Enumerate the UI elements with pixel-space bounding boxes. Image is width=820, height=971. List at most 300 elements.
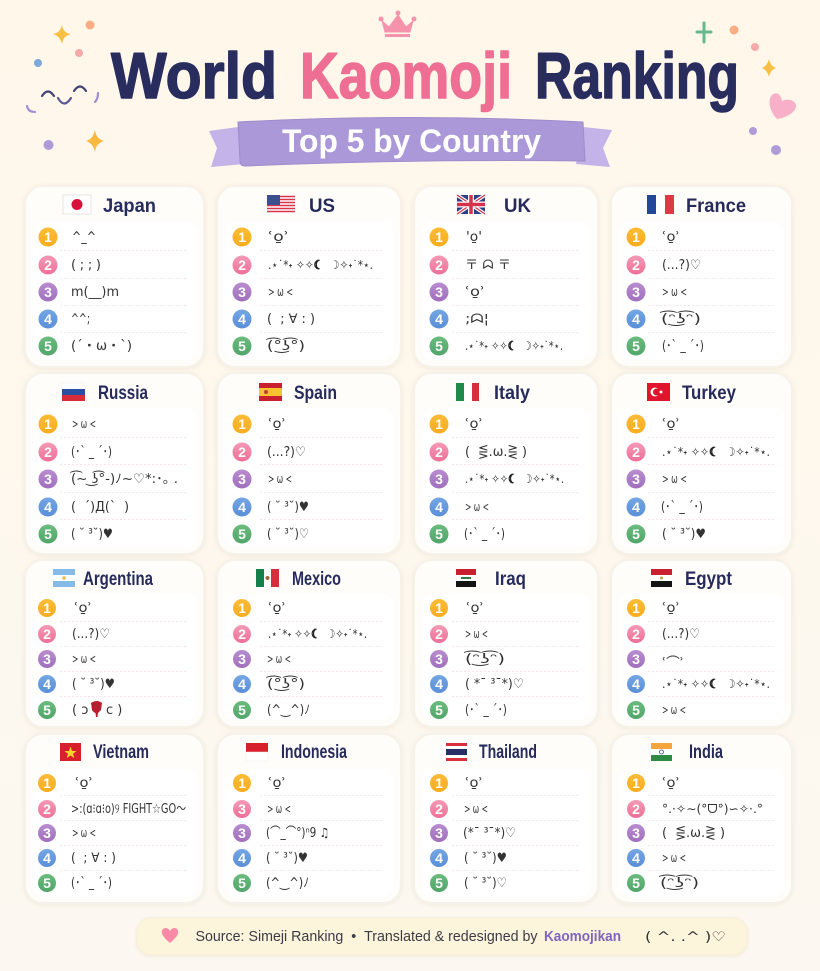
rank 1: UK: 'o̱' (466, 230, 482, 245)
rank 1: Thailand: ʿo̱ʾ (465, 776, 483, 791)
rank 4: Iraq: 4 (435, 676, 443, 692)
rank 3: India: ( ⋚.ω.⋛ ) (662, 825, 725, 841)
heading: Egypt: Egypt (685, 569, 733, 590)
rank 1: Vietnam: 1 (43, 775, 51, 791)
rank 2: Egypt (627, 625, 700, 643)
panel: Spain (217, 373, 401, 554)
rank 4: UK (430, 310, 489, 328)
rank 5: Vietnam: (･` _ ´･) (71, 876, 112, 891)
rank 5: Iraq: (･` _ ´･) (465, 703, 507, 718)
rank 2: Indonesia: > ω < (267, 802, 291, 816)
panel: US (217, 186, 401, 367)
rank 2: Egypt: 2 (632, 626, 640, 642)
rank 1: US: ʿo̱ʾ (268, 230, 289, 245)
rank 2: Japan: ( ; ; ) (71, 258, 101, 273)
rank 1: Japan: 1 (44, 229, 52, 245)
flag: Turkey (647, 383, 670, 401)
rank 2: Thailand: 2 (435, 801, 443, 817)
flag: Russia (62, 383, 85, 401)
panel: Russia (25, 373, 204, 554)
rank 4: Indonesia: 4 (238, 850, 246, 866)
rank 3: France (626, 282, 687, 302)
rank 3: Russia: 3 (44, 471, 52, 487)
rank 4: Egypt: .⋆˙*˖ ✧✧☾ ☽✧˖˙*⋆. (662, 677, 770, 691)
heading: Argentina: Argentina (83, 569, 153, 590)
panel: France (611, 186, 792, 367)
panel: Argentina (25, 560, 204, 727)
rank 3: US: > ω < (268, 285, 293, 299)
rank 4: Egypt (627, 675, 770, 693)
rank 4: Italy: > ω < (465, 500, 489, 514)
panel: Japan (25, 186, 204, 367)
rank 3: Thailand: 3 (435, 825, 443, 841)
rank 2: France (626, 256, 701, 274)
rank 2: Vietnam (38, 800, 186, 818)
rank 3: Italy (430, 470, 564, 488)
rank 2: Thailand: > ω < (464, 802, 488, 816)
rank 2: UK: 〒 ᗣ 〒 (465, 258, 511, 273)
panel: Mexico (217, 560, 401, 727)
rank 5: India (627, 874, 699, 892)
rank 5: Turkey (626, 524, 706, 544)
rank 3: Iraq: (͡ᵔ͜ʖ͡ᵔ) (464, 651, 505, 667)
rank 3: Turkey: 3 (632, 471, 640, 487)
rank 4: Egypt: 4 (632, 676, 640, 692)
rank 1: Russia: 1 (44, 416, 52, 432)
footer kaomoji: ( ^. .^ )♡ (645, 930, 726, 945)
panel: Indonesia (217, 734, 401, 903)
rank 4: Argentina: 4 (43, 676, 51, 692)
rank 2: Russia (38, 442, 112, 462)
panel: Vietnam (25, 734, 204, 903)
rank 1: Indonesia: 1 (238, 775, 246, 791)
rank 4: Turkey: 4 (632, 499, 640, 515)
rank 3: Egypt: 3 (632, 651, 640, 667)
heading: Vietnam: Vietnam (93, 742, 149, 763)
rank 2: Spain (232, 442, 306, 462)
rank 5: US: 5 (238, 338, 246, 354)
flag: US (267, 195, 295, 214)
rank 5: Russia: 5 (44, 526, 52, 542)
rank 5: US (232, 336, 305, 356)
rank 2: Indonesia: 3 (238, 801, 246, 817)
rank 1: India: ʿo̱ʾ (662, 776, 680, 791)
flag: Mexico (256, 569, 279, 587)
rank 1: Thailand: 1 (435, 775, 443, 791)
rank 2: Thailand (430, 800, 488, 818)
rank 1: Mexico: 1 (238, 600, 246, 616)
rank 1: Spain: 1 (238, 416, 246, 432)
rank 2: Iraq: > ω < (465, 627, 488, 641)
rank 3: Thailand: (*¯ ³¯*)♡ (463, 826, 516, 841)
heading: Italy: Italy (494, 383, 530, 404)
rank 2: US: 2 (238, 257, 246, 273)
rank 4: Mexico: (͡°͜ʖ͡°) (266, 676, 305, 692)
rank 1: Egypt: ʿo̱ʾ (662, 601, 680, 616)
rank 1: US: 1 (238, 229, 246, 245)
rank 2: Italy: ( ⋚.ω.⋛ ) (465, 444, 527, 460)
rank 3: India (627, 824, 725, 842)
rank 3: Russia (38, 470, 178, 488)
rank 2: Mexico: 2 (238, 626, 246, 642)
rank 3: Iraq: 3 (435, 651, 443, 667)
rank 5: India: (͡ᵔ͜ʖ͡ᵔ) (659, 875, 699, 891)
rank 3: Indonesia: 3 (238, 825, 246, 841)
rank 5: Italy: (･` _ ´･) (464, 527, 505, 542)
rank 3: Indonesia (233, 824, 329, 842)
flag: Iraq (456, 569, 476, 587)
rank 4: US: 4 (238, 311, 246, 327)
rank 4: Spain: 4 (238, 499, 246, 515)
rank 4: Japan: 4 (44, 311, 52, 327)
rank 3: Mexico: > ω < (267, 652, 291, 666)
rank 3: Argentina: > ω < (72, 652, 96, 666)
rank 5: UK: 5 (435, 338, 443, 354)
rank 3: Mexico (233, 650, 291, 668)
rank 3: India: 3 (632, 825, 640, 841)
rank 4: Japan (38, 310, 90, 328)
heading: Turkey: Turkey (682, 383, 736, 404)
rank 4: Russia (38, 498, 129, 516)
heading: Spain: Spain (294, 383, 337, 404)
rank 3: Japan: 3 (44, 284, 52, 300)
rank 4: US: ( ; ∀ : ) (267, 312, 315, 327)
rank 5: Russia (38, 524, 113, 544)
panel: Turkey (611, 373, 792, 554)
flag: France (647, 195, 674, 214)
rank 2: Italy (430, 442, 527, 462)
rank 4: US (232, 310, 315, 328)
rank 5: Iraq (430, 701, 507, 719)
rank 2: Vietnam: >:(ɑ⁝ɑ⁝o)୨ FIGHT☆GO〜 (71, 802, 186, 817)
heading: US: US (309, 196, 335, 217)
flag: Italy (456, 383, 479, 401)
flag: India (651, 743, 672, 761)
rank 4: Vietnam (38, 849, 116, 867)
rank 1: Vietnam: ʿo̱ʾ (75, 776, 93, 791)
rank 1: UK (430, 228, 482, 246)
rank 3: US (232, 282, 293, 302)
panel: Italy (414, 373, 598, 554)
rank 1: Iraq: ʿo̱ʾ (466, 601, 484, 616)
flag: Vietnam (60, 743, 81, 761)
rank 1: Argentina: 1 (43, 600, 51, 616)
rank 3: Indonesia: (⌒_⌒°)ⁿ9 ♫ (266, 826, 329, 841)
rank 3: Egypt (627, 650, 684, 671)
rank 5: Spain: 5 (238, 526, 246, 542)
rank 1: Egypt (627, 599, 680, 617)
rank 2: Russia: 2 (44, 444, 52, 460)
heading: France: France (686, 196, 746, 217)
rank 4: Vietnam: 4 (43, 850, 51, 866)
rank 3: France: 3 (632, 284, 640, 300)
rank 1: Japan (38, 228, 96, 246)
panel: Egypt (611, 560, 792, 727)
rank 1: Egypt: 1 (632, 600, 640, 616)
heading: Russia: Russia (98, 383, 148, 404)
rank 4: France: 4 (632, 311, 640, 327)
rank 1: France: 1 (632, 229, 640, 245)
footer bar (137, 918, 747, 955)
rank 2: Mexico: .⋆˙*˖ ✧✧☾ ☽✧˖˙*⋆. (268, 627, 367, 641)
rank 2: Turkey (626, 442, 770, 462)
rank 3: Turkey: > ω < (662, 472, 687, 486)
rank 5: Egypt: > ω < (662, 703, 686, 717)
rank 1: Russia (38, 414, 96, 434)
rank 2: US: .⋆˙*˖ ✧✧☾ ☽✧˖˙*⋆. (268, 258, 373, 272)
rank 5: Spain: ( ˘ ³˘)♡ (267, 527, 309, 542)
rank 4: Argentina: ( ˘ ³˘)♥ (72, 677, 115, 692)
rank 4: Thailand: ( ˘ ³˘)♥ (464, 851, 507, 866)
rank 1: France (626, 228, 680, 246)
rank 2: US (232, 256, 373, 274)
flag: UK (457, 195, 485, 214)
rank 4: India: 4 (632, 850, 640, 866)
rank 4: France: (͡ᵔ͜ʖ͡ᵔ) (660, 311, 701, 327)
rank 4: Japan: ^^; (71, 312, 90, 327)
rank 2: Japan: 2 (44, 257, 52, 273)
rank 5: Turkey: ( ˘ ³˘)♥ (662, 527, 706, 542)
rank 3: Argentina: 3 (43, 651, 51, 667)
rank 3: Italy: 3 (435, 471, 443, 487)
rank 5: France (626, 336, 704, 356)
rank 3: France: > ω < (662, 285, 687, 299)
rank 4: France (626, 310, 701, 328)
rank 5: India: 5 (632, 875, 640, 891)
flag: Spain (259, 383, 282, 401)
title: World (111, 39, 277, 112)
rank 1: Argentina (38, 599, 92, 617)
rank 1: US (232, 228, 289, 246)
rank 1: Russia: > ω < (72, 417, 96, 431)
rank 1: Argentina: ʿo̱ʾ (74, 601, 92, 616)
heading: Indonesia: Indonesia (281, 742, 347, 763)
rank 5: UK (430, 336, 563, 356)
rank 5: Mexico: 5 (238, 702, 246, 718)
rank 1: India (627, 774, 680, 792)
rank 4: Spain: ( ˘ ³˘)♥ (267, 500, 309, 515)
rank 4: Mexico: 4 (238, 676, 246, 692)
source credit: Source: Simeji Ranking • Translated & redesigned by (196, 928, 538, 945)
rank 4: Thailand (430, 849, 507, 867)
rank 1: Italy: ʿo̱ʾ (465, 417, 483, 432)
heading: Iraq: Iraq (495, 569, 526, 590)
flag: Thailand (446, 743, 467, 761)
rank 4: Russia: ( ´)Д(` ) (71, 500, 129, 515)
rank 4: UK: 4 (435, 311, 443, 327)
ribbon banner (209, 118, 612, 167)
rank 4: Turkey: (･` _ ´･) (661, 500, 703, 515)
rank 1: Vietnam (38, 774, 93, 792)
rank 1: Turkey (626, 414, 680, 434)
rank 2: Mexico (233, 625, 367, 643)
rank 2: India: °.·✧∼(°ᗜ°)∽✧·.° (662, 802, 763, 816)
rank 5: Iraq: 5 (435, 702, 443, 718)
flag: Egypt (651, 569, 672, 587)
decorations: left sparkles and face (27, 20, 104, 152)
rank 3: Italy: .⋆˙*˖ ✧✧☾ ☽✧˖˙*⋆. (465, 472, 564, 486)
rank 5: Italy: 5 (435, 526, 443, 542)
rank 1: Spain: ʿo̱ʾ (268, 417, 286, 432)
rank 4: Italy: 4 (435, 499, 443, 515)
rank 2: Turkey: .⋆˙*˖ ✧✧☾ ☽✧˖˙*⋆. (662, 445, 770, 459)
rank 2: Iraq (430, 625, 488, 643)
rank 1: Mexico (233, 599, 286, 617)
rank 4: Italy (430, 498, 489, 516)
rank 1: Turkey: 1 (632, 416, 640, 432)
rank 2: UK: 2 (435, 257, 443, 273)
rank 3: Thailand (430, 824, 516, 842)
rank 5: Argentina: c ) (106, 703, 122, 718)
rank 2: Spain: (...?)♡ (267, 445, 306, 460)
rank 4: Indonesia (233, 849, 308, 867)
rank 1: Iraq (430, 599, 484, 617)
rank 3: Vietnam (38, 824, 96, 842)
rank 4: Iraq (430, 675, 524, 693)
rank 2: Russia: (･` _ ´･) (71, 445, 112, 460)
rank 1: Indonesia (233, 774, 286, 792)
rank 2: France: (...?)♡ (662, 258, 701, 273)
rank 3: Japan (38, 282, 119, 302)
rank 4: Mexico (233, 675, 305, 693)
panel: Iraq (414, 560, 598, 727)
rank 3: UK: ʿo̱ʾ (465, 285, 485, 300)
rank 1: Indonesia: ʿo̱ʾ (268, 776, 286, 791)
rank 5: UK: .⋆˙*˖ ✧✧☾ ☽✧˖˙*⋆. (465, 339, 563, 353)
rank 3: Vietnam: 3 (43, 825, 51, 841)
rank 4: Argentina (38, 675, 115, 693)
decorations: right sparkles and heart (697, 23, 796, 155)
flag: Argentina (53, 569, 75, 587)
rank 5: Vietnam: 5 (43, 875, 51, 891)
rank 4: India: > ω < (662, 851, 686, 865)
rank 4: Vietnam: ( ; ∀ : ) (71, 851, 116, 866)
rank 5: Argentina: 5 (43, 702, 51, 718)
rank 3: Iraq (430, 650, 505, 668)
rank 3: Mexico: 3 (238, 651, 246, 667)
rank 2: Italy: 2 (435, 444, 443, 460)
rank 5: Argentina (38, 701, 122, 719)
rank 4: Turkey (626, 498, 703, 516)
rank 5: Spain (232, 524, 309, 544)
rank 2: Argentina: (...?)♡ (72, 627, 110, 642)
heading: Mexico: Mexico (292, 569, 341, 590)
rank 5: Thailand: ( ˘ ³˘)♡ (464, 876, 507, 891)
rank 5: Egypt: 5 (632, 702, 640, 718)
flag: Indonesia (246, 743, 268, 761)
rank 2: Iraq: 2 (435, 626, 443, 642)
rank 1: UK: 1 (435, 229, 443, 245)
rank 4: Iraq: ( *¯ ³¯*)♡ (465, 677, 524, 692)
rank 5: Thailand (430, 874, 507, 892)
rank 2: Japan (38, 256, 101, 274)
rank 2: Argentina (38, 625, 110, 643)
rank 5: Vietnam (38, 874, 112, 892)
title (111, 39, 739, 112)
rank 5: Mexico (233, 701, 310, 719)
rank 5: Japan (38, 336, 132, 356)
rank 5: Argentina: ( ɔ (72, 703, 88, 718)
heading: India: India (689, 742, 723, 763)
rank 2: Argentina: 2 (43, 626, 51, 642)
rank 2: Indonesia (233, 800, 291, 818)
title: Kaomoji (300, 39, 512, 112)
rank 1: Thailand (430, 774, 483, 792)
rank 3: Russia: (͡~ ͜ʖ͡°-)ﾉ~♡*:･｡ . (70, 471, 178, 487)
rank 3: US: 3 (238, 284, 246, 300)
rank 5: Indonesia (233, 874, 309, 892)
title: Ranking (535, 39, 739, 112)
rank 3: Egypt: ʿ⌒ʾ (662, 656, 684, 671)
rank 5: Indonesia: (^‿^)ﾉ (266, 876, 309, 891)
rank 4: UK: ;ᗣ¦ (465, 312, 489, 327)
heading: Thailand: Thailand (479, 742, 537, 763)
rank 1: Spain (232, 414, 286, 434)
panel: India (611, 734, 792, 903)
rank 3: Turkey (626, 470, 687, 488)
rank 2: UK (430, 256, 511, 274)
rank 5: Japan: (´・ω・`) (71, 339, 132, 354)
rank 3: Vietnam: > ω < (72, 826, 96, 840)
rank 5: Russia: ( ˘ ³˘)♥ (71, 527, 113, 542)
rank 3: UK (430, 282, 485, 302)
rank 5: Egypt (627, 701, 686, 719)
rank 5: France: 5 (632, 338, 640, 354)
rank 1: Italy: 1 (435, 416, 443, 432)
rank 4: Russia: 4 (44, 499, 52, 515)
rank 2: Vietnam: 2 (43, 801, 51, 817)
rank 3: Spain: 3 (238, 471, 246, 487)
rank 5: Indonesia: 5 (238, 875, 246, 891)
rank 5: Thailand: 5 (435, 875, 443, 891)
icon: crown (378, 10, 416, 37)
rank 1: Italy (430, 414, 483, 434)
rank 3: UK: 3 (435, 284, 443, 300)
rank 3: Spain (232, 470, 292, 488)
rank 5: US: (͡°͜ʖ͡°) (266, 338, 305, 354)
rank 4: Thailand: 4 (435, 850, 443, 866)
rank 5: Japan: 5 (44, 338, 52, 354)
rank 1: Mexico: ʿo̱ʾ (268, 601, 286, 616)
rank 5: France: (･` _ ´･) (662, 339, 704, 354)
heading: UK: UK (504, 196, 531, 217)
rank 5: Mexico: (^‿^)ﾉ (267, 703, 310, 718)
rank 3: Japan: m(__)m (71, 285, 119, 300)
rank 3: Argentina (38, 650, 96, 668)
panel: UK (414, 186, 598, 367)
rank 2: India: 2 (632, 801, 640, 817)
rank 1: France: ʿo̱ʾ (662, 230, 680, 245)
panel: Thailand (414, 734, 598, 903)
rank 5: Italy (430, 524, 505, 544)
rank 2: Spain: 2 (238, 444, 246, 460)
rank 4: India (627, 849, 686, 867)
rank 1: India: 1 (632, 775, 640, 791)
flag: Japan (63, 195, 91, 214)
credit name: Kaomojikan (544, 928, 621, 945)
rank 1: Turkey: ʿo̱ʾ (662, 417, 680, 432)
rank 3: Spain: > ω < (268, 472, 292, 486)
rank 2: France: 2 (632, 257, 640, 273)
ribbon subtitle: Top 5 by Country (282, 123, 541, 159)
rank 2: India (627, 800, 763, 818)
icon: heart (162, 928, 178, 943)
rank 4: Indonesia: ( ˘ ³˘)♥ (266, 851, 308, 866)
rank 1: Japan: ^_^ (72, 230, 96, 245)
rank 4: Spain (232, 498, 309, 516)
rank 2: Turkey: 2 (632, 444, 640, 460)
rank 1: Iraq: 1 (435, 600, 443, 616)
